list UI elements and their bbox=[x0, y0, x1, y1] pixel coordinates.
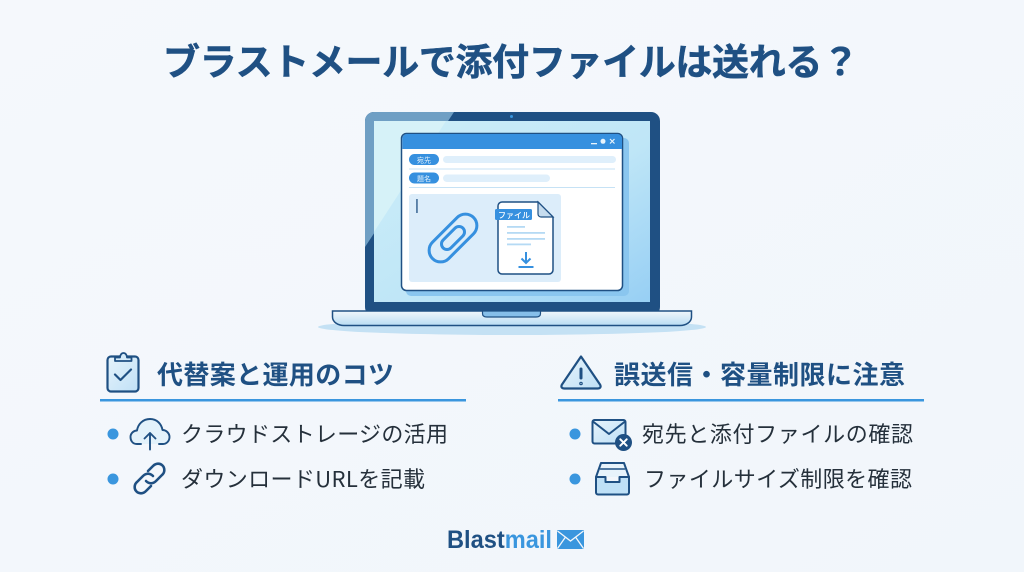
title: ブラストメールで添付ファイルは送れる？ bbox=[163, 32, 859, 86]
icon: envelope with x bbox=[592, 420, 632, 451]
icon: chain link bbox=[135, 464, 164, 493]
panel: alternatives and tips bbox=[100, 353, 466, 494]
laptop illustration bbox=[318, 112, 706, 335]
bullet item: check size limit: ファイルサイズ制限を確認 bbox=[644, 462, 912, 494]
icon: warning triangle bbox=[561, 356, 601, 388]
attachment area bbox=[409, 194, 561, 282]
recipient field: 宛先 bbox=[417, 156, 431, 166]
icon: file document bbox=[495, 202, 553, 274]
icon: file tray bbox=[596, 463, 629, 494]
panel: mis-sending and size limits bbox=[558, 355, 924, 494]
subject field: 題名 bbox=[417, 174, 431, 184]
recipient field bbox=[409, 154, 616, 166]
icon: cloud upload bbox=[130, 419, 170, 450]
bullet item: cloud storage: クラウドストレージの活用 bbox=[181, 417, 448, 449]
subject field bbox=[409, 172, 550, 184]
heading: alternatives: 代替案と運用のコツ bbox=[157, 355, 394, 392]
bullet item: check recipient: 宛先と添付ファイルの確認 bbox=[642, 417, 913, 449]
laptop base bbox=[332, 311, 692, 326]
icon: file document: ファイル bbox=[498, 210, 530, 221]
email window bbox=[402, 134, 629, 296]
icon: paperclip bbox=[424, 209, 482, 267]
logo: Blastmail: Blastmail bbox=[447, 526, 552, 554]
bullet item: download URL: ダウンロードURLを記載 bbox=[181, 462, 425, 494]
icon: clipboard bbox=[108, 353, 138, 392]
icon: logo envelope bbox=[557, 530, 584, 549]
heading: cautions: 誤送信・容量制限に注意 bbox=[614, 355, 905, 392]
window controls bbox=[591, 139, 614, 144]
